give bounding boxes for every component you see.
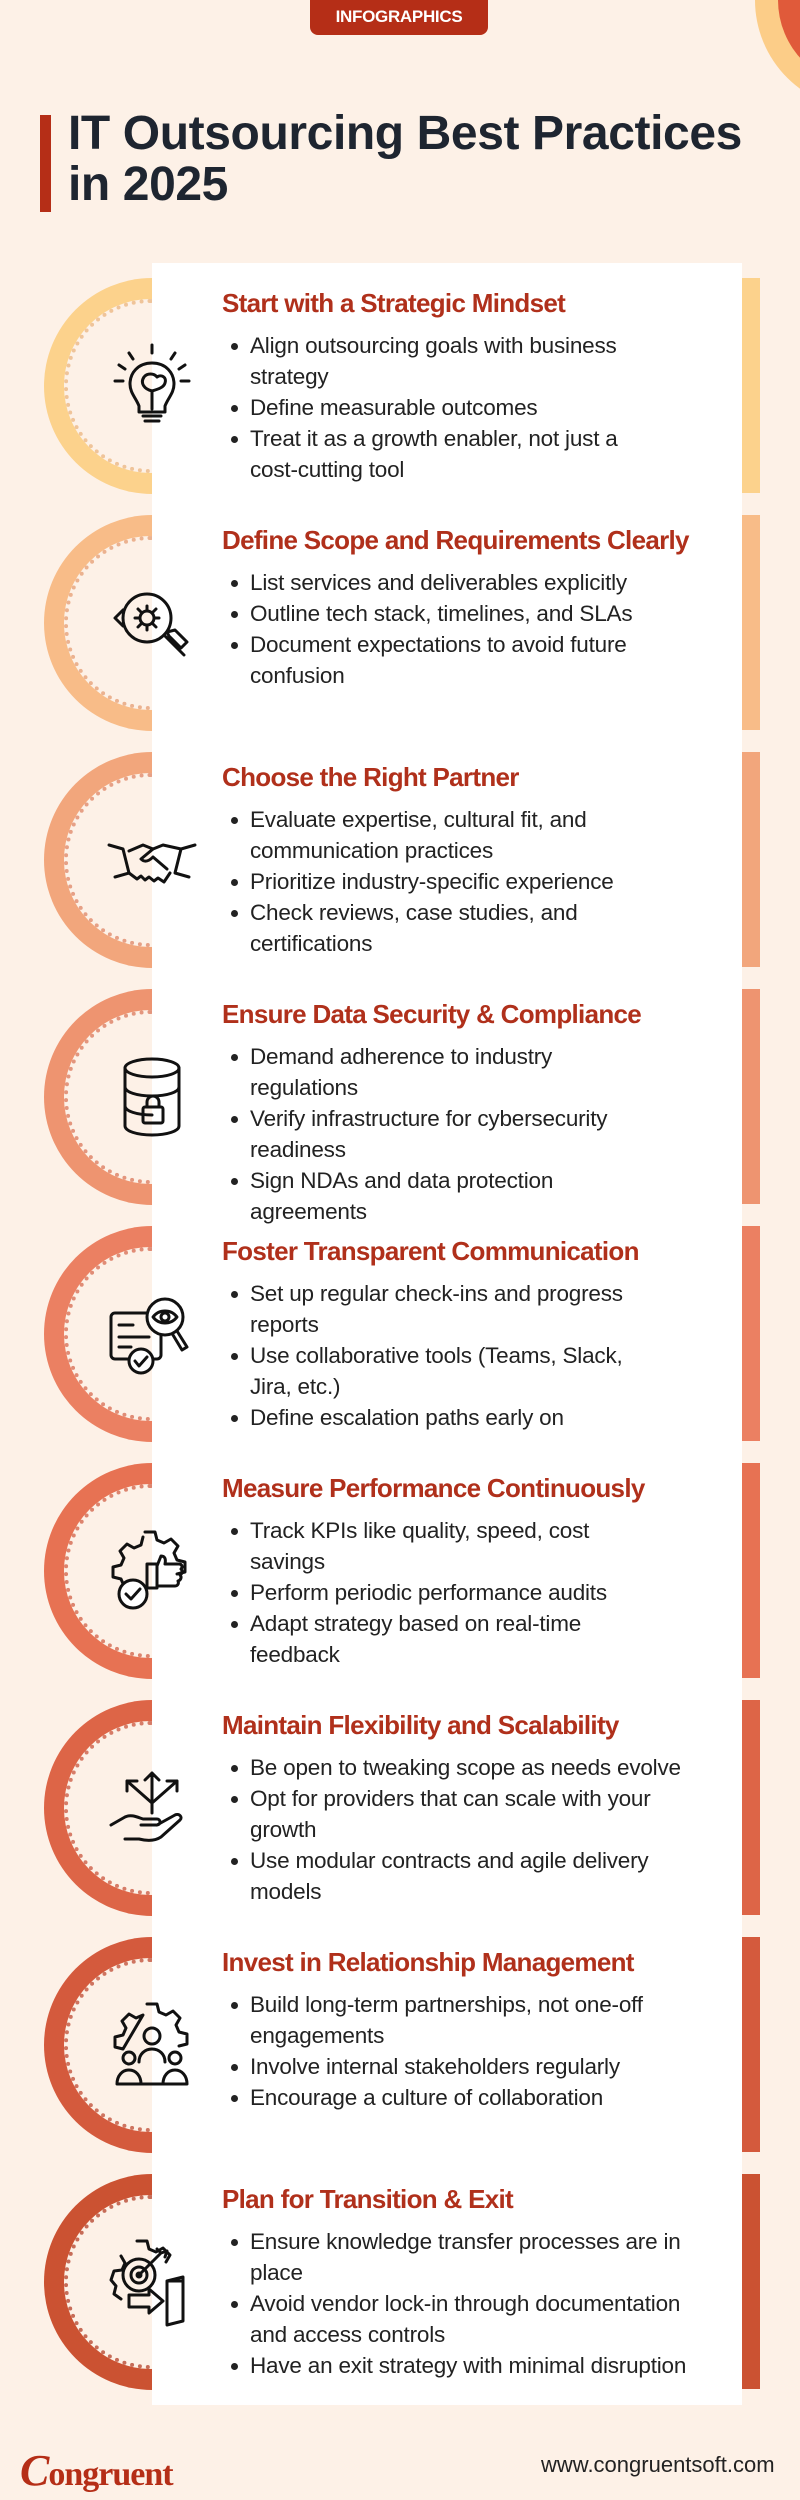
section 3 text: Check reviews, case studies, and (250, 900, 578, 925)
section 8 text: Build long-term partnerships, not one-off (250, 1992, 643, 2017)
section 2 text (222, 525, 690, 688)
section 3 text: Prioritize industry-specific experience (250, 869, 614, 894)
section 4 text: readiness (250, 1137, 346, 1162)
icon: hand with arrows (109, 1771, 183, 1842)
section 2 text: Outline tech stack, timelines, and SLAs (250, 601, 632, 626)
section 3 text (222, 762, 614, 956)
section 3 text: Evaluate expertise, cultural fit, and (250, 807, 587, 832)
section 1 text: Start with a Strategic Mindset (222, 288, 565, 318)
section 5 text: Set up regular check-ins and progress (250, 1281, 623, 1306)
inner circle 8 (64, 1958, 238, 2132)
section 7 text: Use modular contracts and agile delivery (250, 1848, 648, 1873)
section 6 text: feedback (250, 1642, 340, 1667)
icon: gear with thumbs up (112, 1530, 186, 1610)
section 2 text: Define Scope and Requirements Clearly (222, 525, 689, 555)
section 4 text: Demand adherence to industry (250, 1044, 552, 1069)
footer url: www.congruentsoft.com (541, 2452, 775, 2477)
inner circle 5 (64, 1247, 238, 1421)
section 9 text: Avoid vendor lock-in through documentation (250, 2291, 680, 2316)
section 1 text: Treat it as a growth enabler, not just a (250, 426, 618, 451)
arcs section 7 (44, 1700, 260, 1916)
section 5 text (222, 1236, 639, 1430)
strip 1 (742, 278, 760, 493)
section 3 text: Choose the Right Partner (222, 762, 519, 792)
section 4 text: Sign NDAs and data protection (250, 1168, 553, 1193)
icon: database with lock (124, 1058, 180, 1136)
section 1 text: Align outsourcing goals with business (250, 333, 617, 358)
strip 2 (742, 515, 760, 730)
arcs section 5 (44, 1226, 260, 1442)
decoration: top-right ring (755, 0, 800, 110)
text: agreements (250, 1199, 367, 1224)
arcs section 8 (44, 1937, 260, 2153)
footer logo: Congruent (20, 2446, 173, 2495)
section 6 text: Adapt strategy based on real-time (250, 1611, 581, 1636)
inner circle 3 (64, 773, 238, 947)
icon: target gear exit (110, 2240, 184, 2326)
strip 4 (742, 989, 760, 1204)
strip 3 (742, 752, 760, 967)
section 8 text: Encourage a culture of collaboration (250, 2085, 603, 2110)
section 7 text: Be open to tweaking scope as needs evolve (250, 1755, 681, 1780)
icon: people in gear (114, 2002, 188, 2086)
badge: infographics (310, 0, 488, 35)
section 7 text (222, 1710, 681, 1904)
arcs section 3 (44, 752, 260, 968)
icon: document with eye (110, 1298, 189, 1374)
section 7 text: Maintain Flexibility and Scalability (222, 1710, 619, 1740)
section 7 text: Opt for providers that can scale with your (250, 1786, 651, 1811)
section 8 text: Involve internal stakeholders regularly (250, 2054, 620, 2079)
section 3 text: certifications (250, 931, 372, 956)
section 1 text: cost-cutting tool (250, 457, 404, 482)
inner circle 2 (64, 536, 238, 710)
section 4 text (222, 999, 641, 1224)
white content panel (152, 263, 742, 2405)
section 1 text (222, 288, 618, 482)
strip 9 (742, 2174, 760, 2389)
section 5 text: Foster Transparent Communication (222, 1236, 639, 1266)
section 5 text: Use collaborative tools (Teams, Slack, (250, 1343, 623, 1368)
inner circle 1 (64, 299, 238, 473)
strip 7 (742, 1700, 760, 1915)
section 7 text: models (250, 1879, 321, 1904)
title (68, 107, 742, 211)
section 2 text: Document expectations to avoid future (250, 632, 627, 657)
section 8 text: engagements (250, 2023, 384, 2048)
inner circle 6 (64, 1484, 238, 1658)
arcs section 1 (44, 278, 260, 494)
inner circle 4 (64, 1010, 238, 1184)
section 4 text: regulations (250, 1075, 358, 1100)
strip 5 (742, 1226, 760, 1441)
arcs section 2 (44, 515, 260, 731)
section 1 text: strategy (250, 364, 328, 389)
section 4 text: Verify infrastructure for cybersecurity (250, 1106, 607, 1131)
arcs section 4 (44, 989, 260, 1205)
section 6 text: Perform periodic performance audits (250, 1580, 607, 1605)
badge: infographics: INFOGRAPHICS (336, 7, 462, 26)
inner circle 9 (64, 2195, 238, 2369)
title accent bar (40, 115, 51, 212)
strip 8 (742, 1937, 760, 2152)
section 8 text: Invest in Relationship Management (222, 1947, 634, 1977)
title: in 2025 (68, 158, 228, 211)
section 9 text: Have an exit strategy with minimal disruption (250, 2353, 686, 2378)
icon: magnifier with gear (113, 592, 189, 657)
section 9 text: Ensure knowledge transfer processes are in (250, 2229, 681, 2254)
section 6 text: Measure Performance Continuously (222, 1473, 645, 1503)
section 4 text: Ensure Data Security & Compliance (222, 999, 641, 1029)
section 6 text: savings (250, 1549, 325, 1574)
icon: lightbulb (114, 344, 190, 422)
section 6 text: Track KPIs like quality, speed, cost (250, 1518, 589, 1543)
section 6 text (222, 1473, 646, 1667)
section 1 text: Define measurable outcomes (250, 395, 537, 420)
section 2 text: List services and deliverables explicitly (250, 570, 627, 595)
section 3 text: communication practices (250, 838, 493, 863)
section 9 text: place (250, 2260, 303, 2285)
section 5 text: Jira, etc.) (250, 1374, 340, 1399)
strip 6 (742, 1463, 760, 1678)
section 5 text: Define escalation paths early on (250, 1405, 564, 1430)
section 5 text: reports (250, 1312, 319, 1337)
arcs section 6 (44, 1463, 260, 1679)
title: IT Outsourcing Best Practices (68, 107, 742, 160)
section 9 text: and access controls (250, 2322, 445, 2347)
section 7 text: growth (250, 1817, 316, 1842)
icon: handshake (108, 844, 196, 884)
section 9 text: Plan for Transition & Exit (222, 2184, 513, 2214)
section 9 text (222, 2184, 686, 2378)
section 2 text: confusion (250, 663, 345, 688)
arcs section 9 (44, 2174, 260, 2390)
section 8 text (222, 1947, 644, 2110)
inner circle 7 (64, 1721, 238, 1895)
